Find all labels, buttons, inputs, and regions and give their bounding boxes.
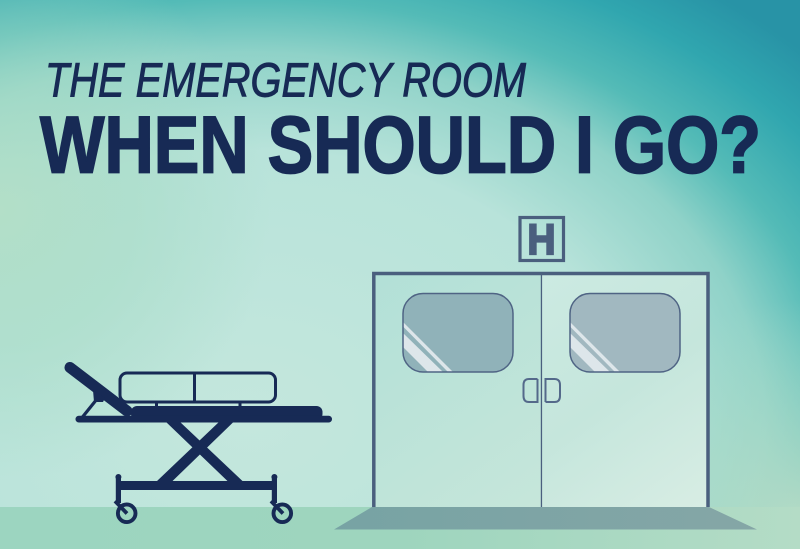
door frame [374, 274, 708, 507]
bed rail [120, 373, 276, 407]
double doors [374, 274, 708, 507]
right window [570, 294, 680, 372]
title [40, 54, 761, 190]
left wheel [118, 504, 136, 522]
left window [403, 294, 513, 372]
right wheel [274, 504, 291, 522]
bottom edge [0, 549, 800, 550]
left post [115, 474, 127, 514]
right post [271, 474, 283, 514]
door centre line [541, 274, 542, 507]
right door panel [542, 274, 708, 507]
letter H: H [528, 216, 556, 264]
base bar [76, 416, 332, 422]
icon: hospital sign [520, 216, 564, 264]
scissor legs cross [156, 421, 234, 482]
mattress [131, 406, 322, 420]
floor mat [334, 507, 757, 530]
subtitle: the emergency room: THE EMERGENCY ROOM [45, 54, 526, 108]
left door panel [374, 274, 542, 507]
right door handle [546, 379, 560, 402]
icon: hospital stretcher [70, 368, 332, 522]
floor [0, 507, 800, 549]
left door handle [524, 379, 538, 402]
raised backrest [70, 368, 127, 411]
backrest support [82, 390, 105, 417]
lower frame [116, 481, 277, 490]
scissor legs [165, 421, 243, 482]
